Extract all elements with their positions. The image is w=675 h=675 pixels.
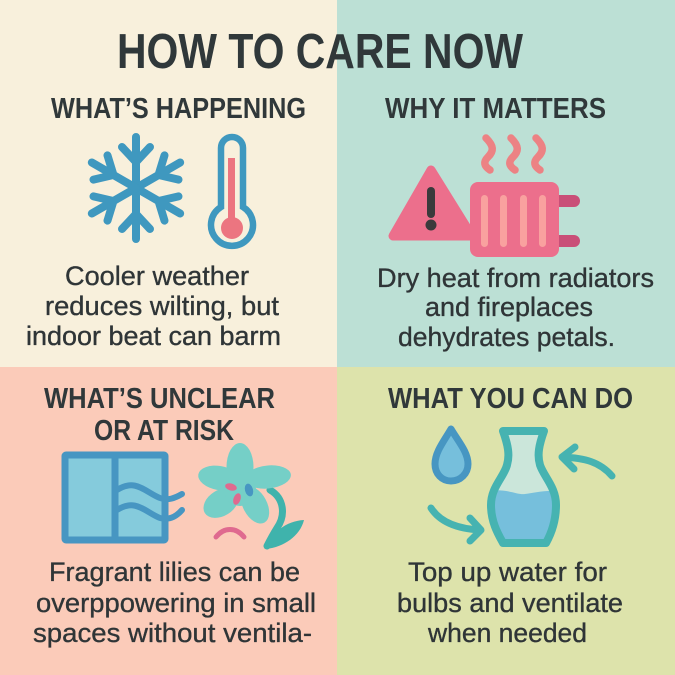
panel: why it matters [337, 0, 675, 367]
panel: what's unclear or at risk [0, 367, 337, 675]
icon: water drop [435, 429, 468, 481]
icon: thermometer [211, 137, 253, 246]
text: what you can do body: when needed [427, 618, 587, 648]
text: what you can do body [397, 557, 623, 648]
heading: why it matters: WHY IT MATTERS [385, 93, 606, 125]
text: why it matters body [377, 263, 654, 352]
panel: what you can do [337, 367, 675, 675]
panel: what's happening [0, 0, 337, 367]
text: what's unclear body: spaces without ventila- [33, 618, 312, 648]
heading: what's unclear or at risk: WHAT’S UNCLEAR [44, 383, 275, 415]
title: HOW TO CARE NOW [117, 25, 524, 79]
text: what's unclear body [33, 557, 316, 648]
heading: what you can do: WHAT YOU CAN DO [388, 383, 633, 415]
icon: snowflake [85, 137, 187, 239]
icon: radiator [470, 182, 580, 257]
text: what you can do body: bulbs and ventilate [397, 588, 623, 618]
text: what's happening body: reduces wilting, but [45, 291, 280, 321]
text: what's unclear body: Fragrant lilies can be [49, 557, 300, 587]
arrow: into vase from lower left [431, 508, 481, 541]
arrow: into vase from upper right [562, 447, 612, 476]
heading: what's unclear or at risk: OR AT RISK [94, 415, 234, 447]
text: why it matters body: dehydrates petals. [398, 322, 615, 352]
heading: what's happening: WHAT’S HAPPENING [51, 93, 306, 125]
heading: what's unclear or at risk [44, 383, 275, 447]
text: what's happening body [26, 261, 281, 351]
text: what's happening body: Cooler weather [65, 261, 249, 291]
icon: vase with water [485, 431, 562, 550]
text: what's happening body: indoor beat can barm [26, 321, 281, 351]
text: what you can do body: Top up water for [408, 557, 607, 587]
icon: wilting flower [196, 443, 304, 549]
icon: window with wind [65, 455, 182, 540]
text: why it matters body: Dry heat from radiators [377, 263, 654, 293]
icon: warning triangle [393, 170, 472, 236]
text: why it matters body: and fireplaces [425, 292, 593, 322]
icon: heat squiggles [485, 138, 542, 170]
text: what's unclear body: overppowering in small [36, 588, 316, 618]
